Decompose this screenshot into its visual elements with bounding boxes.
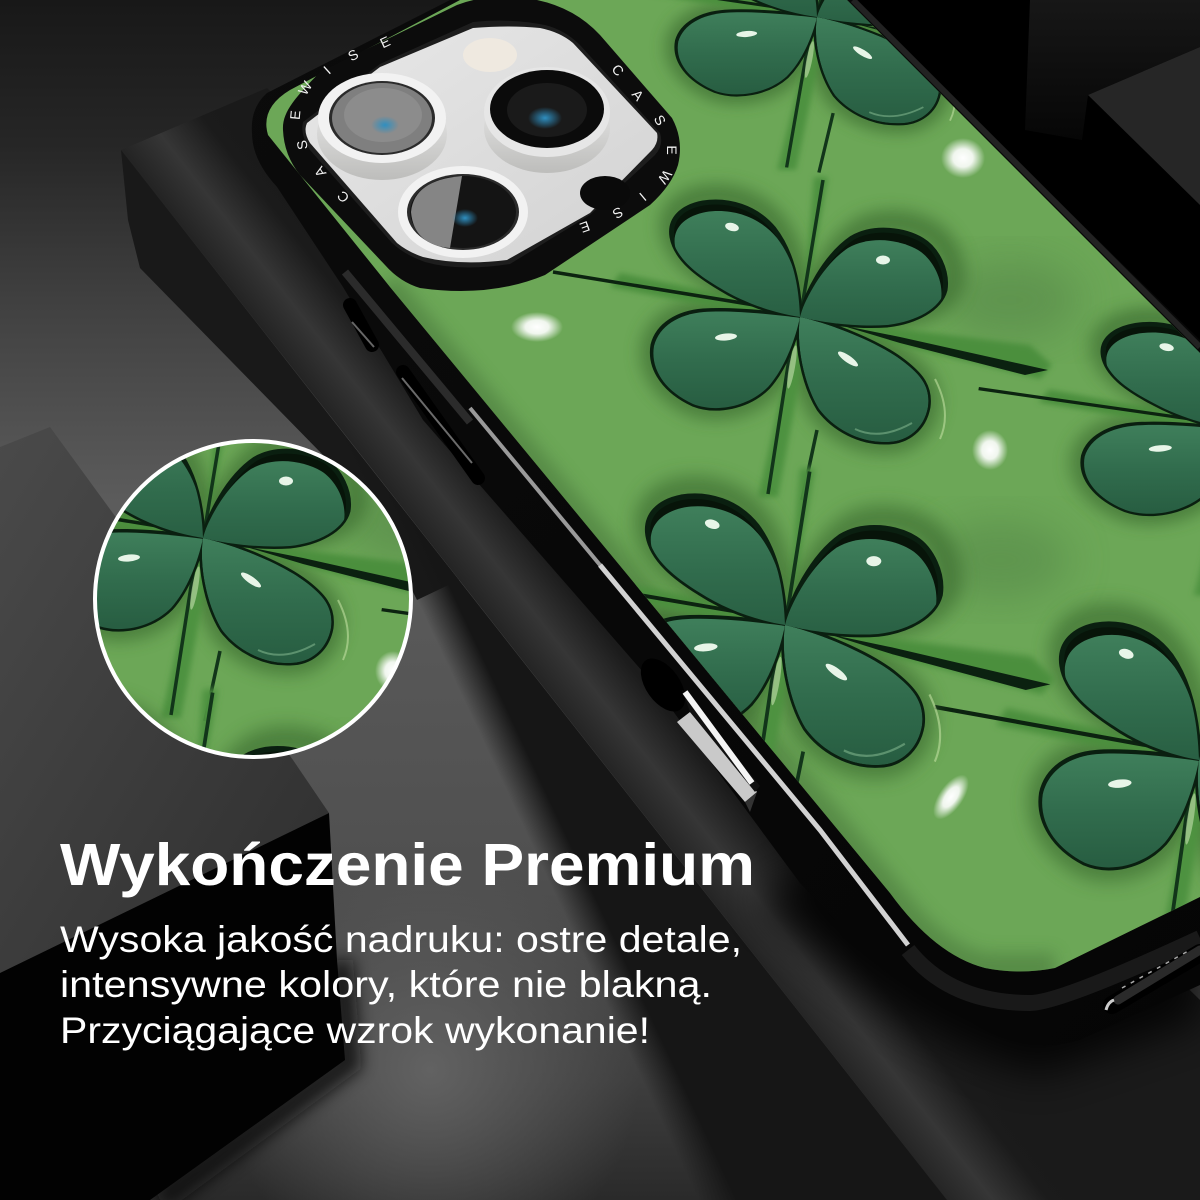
description text: intensywne kolory, które nie blakną.: [60, 964, 712, 1005]
flash: [463, 38, 517, 72]
brand lettering: CASEWISE: E: [664, 145, 680, 155]
charging port: [1106, 950, 1200, 1010]
camera plate: [306, 26, 657, 262]
brand lettering: CASEWISE: I: [320, 63, 334, 77]
lens 2: [484, 67, 610, 173]
heading: Wykończenie Premium: [60, 832, 755, 898]
brand lettering: CASEWISE: A: [629, 86, 648, 104]
back panel with clover print: [266, 0, 1200, 972]
brand lettering: CASEWISE: C: [609, 61, 627, 79]
silver action button: [632, 651, 760, 812]
case body: [252, 0, 1200, 1045]
side button slot upper: [350, 305, 374, 347]
description text: Przyciągające wzrok wykonanie!: [60, 1010, 650, 1051]
brand lettering: CASEWISE: A: [310, 163, 329, 180]
brand lettering: CASEWISE: W: [654, 167, 675, 188]
brand lettering: CASEWISE: W: [295, 77, 316, 98]
background: pedestal side face: [121, 150, 947, 1200]
lens 3: [398, 166, 528, 258]
island frame: [283, 0, 680, 291]
phone case: [252, 0, 1200, 1076]
lens 1: [317, 73, 447, 180]
background: top right black block: [840, 0, 1200, 400]
brand lettering: CASEWISE: S: [345, 46, 361, 64]
inner bezel: [302, 21, 661, 268]
brand lettering: CASEWISE: I: [636, 190, 650, 204]
description text: [60, 919, 742, 1051]
case shadow: [760, 800, 1200, 1075]
brand lettering: CASEWISE: C: [334, 188, 352, 206]
brand lettering: CASEWISE: [287, 33, 680, 236]
side button slot long: [402, 372, 478, 478]
brand lettering: CASEWISE: E: [287, 110, 303, 120]
brand lettering: CASEWISE: E: [578, 218, 592, 236]
background: lower left step: [0, 427, 348, 1200]
brand lettering: CASEWISE: E: [377, 33, 393, 51]
magnified detail circle: [93, 439, 413, 759]
case side bands: [345, 272, 1200, 1003]
mic hole: [580, 176, 630, 210]
camera island: [283, 0, 680, 291]
description text: Wysoka jakość nadruku: ostre detale,: [60, 919, 742, 960]
brand lettering: CASEWISE: S: [293, 139, 311, 151]
brand lettering: CASEWISE: S: [610, 204, 626, 222]
right case edge: [853, 0, 1200, 347]
brand lettering: CASEWISE: S: [651, 112, 669, 128]
